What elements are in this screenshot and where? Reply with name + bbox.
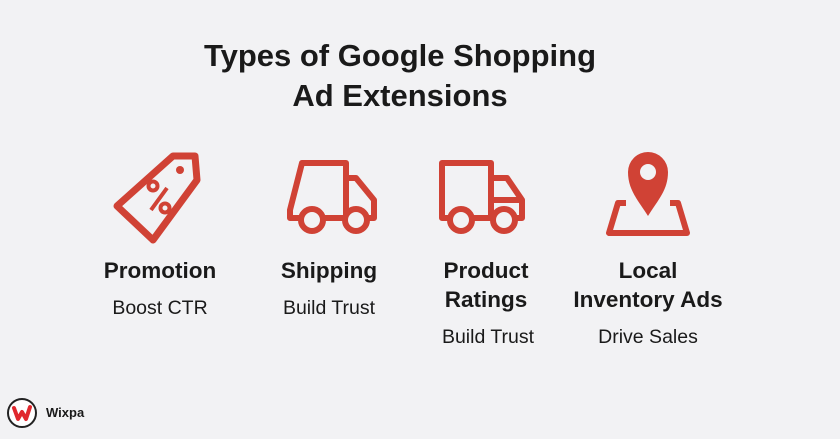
- sub: build trust: Build Trust: [283, 297, 375, 319]
- label: shipping: Shipping: [281, 258, 377, 283]
- title: Types of Google Shopping: [204, 38, 596, 73]
- icon: truck 2: [439, 160, 525, 234]
- logo: Wixpa: [46, 405, 84, 420]
- title: Ad Extensions: [292, 78, 508, 113]
- logo: [7, 398, 84, 428]
- label: product ratings: Ratings: [445, 287, 527, 312]
- label: local inventory ads: Inventory Ads: [573, 287, 723, 312]
- label: product ratings: [443, 258, 528, 312]
- icon: tag: [114, 152, 200, 244]
- sub: boost ctr: Boost CTR: [112, 297, 208, 319]
- label: local inventory ads: Local: [619, 258, 677, 283]
- icon: map pin: [606, 152, 690, 236]
- sub: drive sales: Drive Sales: [598, 326, 698, 348]
- label: promotion: Promotion: [104, 258, 216, 283]
- sub: build trust: Build Trust: [442, 326, 534, 348]
- icon: truck 1: [287, 160, 377, 234]
- title: [204, 38, 596, 113]
- label: local inventory ads: [573, 258, 723, 312]
- label: product ratings: Product: [443, 258, 528, 283]
